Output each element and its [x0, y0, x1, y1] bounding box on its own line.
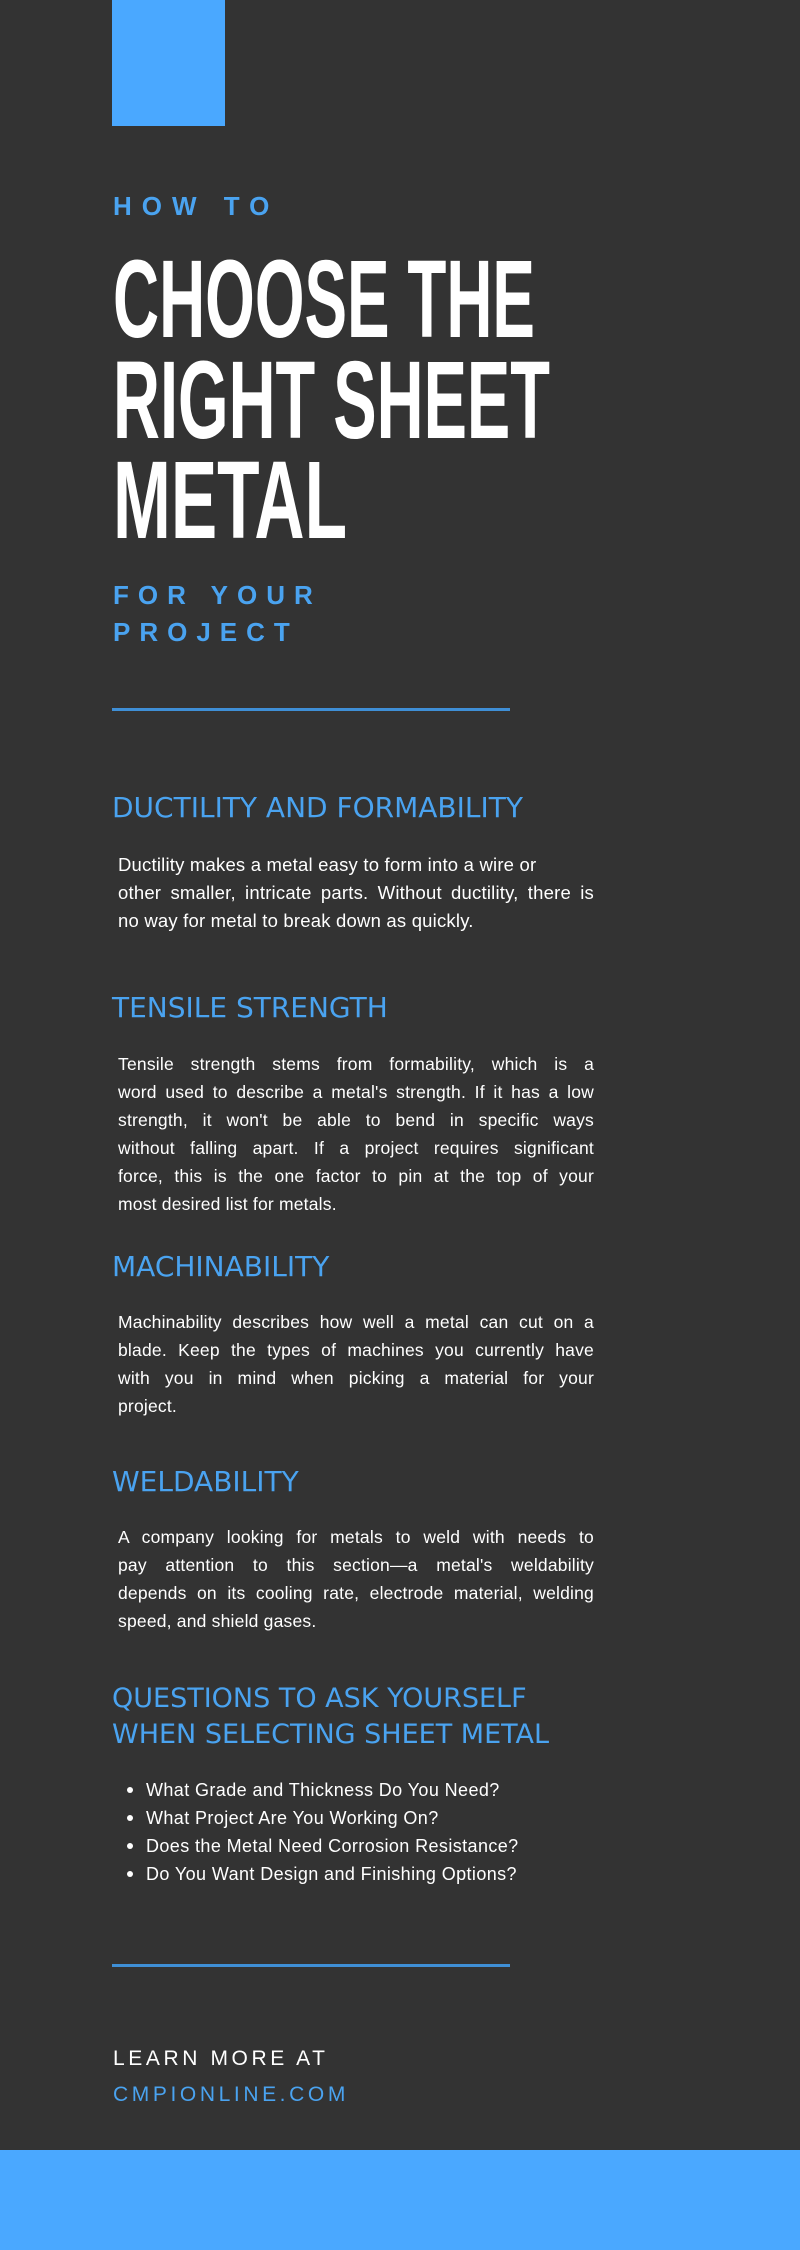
top accent block [112, 0, 225, 126]
heading: ductility: DUCTILITY AND FORMABILITY [112, 791, 523, 824]
text: machinability: with you in mind when picking a material for your [118, 1368, 594, 1388]
list: questions: Do You Want Design and Finishing Options? [146, 1864, 517, 1884]
text: tensile: word used to describe a metal's strength. If it has a low [118, 1082, 594, 1102]
subtitle: FOR YOUR [113, 580, 322, 610]
subtitle: PROJECT [113, 617, 299, 647]
text: machinability [118, 1312, 594, 1416]
text: ductility: no way for metal to break down as quickly. [118, 910, 474, 931]
text: tensile: force, this is the one factor to pin at the top of your [118, 1166, 594, 1186]
text: machinability: Machinability describes how well a metal can cut on a [118, 1312, 594, 1332]
heading: questions [112, 1683, 549, 1750]
list: questions: Does the Metal Need Corrosion Resistance? [146, 1836, 519, 1856]
text: ductility: other smaller, intricate parts. Without ductility, there is [118, 882, 594, 903]
kicker: how to: HOW TO [113, 191, 279, 221]
text: weldability: pay attention to this section—a metal's weldability [118, 1555, 594, 1575]
text: tensile: most desired list for metals. [118, 1194, 337, 1214]
subtitle [113, 580, 322, 647]
text: tensile: strength, it won't be able to bend in specific ways [118, 1110, 594, 1130]
heading: machinability: MACHINABILITY [112, 1250, 329, 1283]
heading: questions: QUESTIONS TO ASK YOURSELF [112, 1683, 527, 1714]
footer cta: CMPIONLINE.COM [113, 2083, 349, 2106]
footer cta: LEARN MORE AT [113, 2047, 329, 2070]
text: weldability [118, 1527, 594, 1631]
text: machinability: project. [118, 1396, 177, 1416]
heading: weldability: WELDABILITY [112, 1465, 299, 1498]
heading: tensile: TENSILE STRENGTH [112, 991, 388, 1024]
text: ductility [118, 854, 594, 931]
heading: questions: WHEN SELECTING SHEET METAL [112, 1719, 549, 1750]
text: tensile: Tensile strength stems from formability, which is a [118, 1054, 594, 1074]
bottom accent bar [0, 2150, 800, 2250]
list: questions [127, 1780, 519, 1884]
title [113, 240, 550, 550]
text: tensile: without falling apart. If a project requires significant [118, 1138, 594, 1158]
text: tensile [118, 1054, 594, 1214]
list: questions: What Grade and Thickness Do You Need? [146, 1780, 500, 1800]
text: ductility: Ductility makes a metal easy to form into a wire or [118, 854, 536, 875]
text: weldability: depends on its cooling rate, electrode material, welding [118, 1583, 594, 1603]
text: weldability: speed, and shield gases. [118, 1611, 316, 1631]
text: machinability: blade. Keep the types of machines you currently have [118, 1340, 594, 1360]
text: weldability: A company looking for metals to weld with needs to [118, 1527, 594, 1547]
list: questions: What Project Are You Working On? [146, 1808, 439, 1828]
footer cta [113, 2047, 349, 2106]
